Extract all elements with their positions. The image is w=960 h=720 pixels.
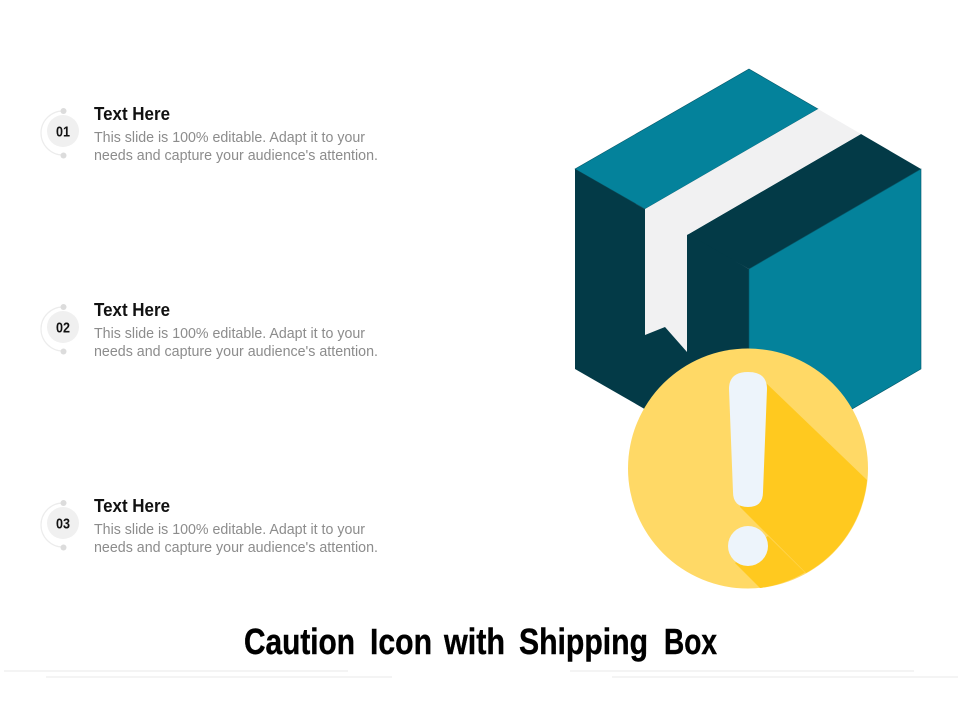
item 03 [41,495,378,556]
exclamation bar [729,372,767,507]
icon: shipping box [575,69,921,469]
item 02 body text: This slide is 100% editable. Adapt it to your [94,326,365,342]
step badge 02 [41,304,79,354]
title: Shipping [519,621,648,662]
caution circle [628,348,868,588]
item 03 body text: needs and capture your audience's attention. [94,540,378,556]
item 02 body text: needs and capture your audience's attention. [94,344,378,360]
title: Icon [370,621,432,662]
item 03 heading: Text Here [94,495,170,516]
step badge 03 [41,500,79,550]
item 03 body text: This slide is 100% editable. Adapt it to your [94,522,365,538]
step badge 02: 02 [56,320,70,336]
icon: caution sign [628,348,868,588]
box right side [749,169,921,469]
long shadow of exclamation dot [735,536,805,588]
title: Box [664,621,717,662]
title: Caution [244,621,355,662]
item 01 body text: This slide is 100% editable. Adapt it to your [94,130,365,146]
exclamation dot [728,526,768,566]
packing tape [645,109,861,352]
item 01 body text: needs and capture your audience's attention. [94,148,378,164]
box right flap [687,134,921,269]
box top flap [575,69,818,209]
step badge 03: 03 [56,516,70,532]
step badge 01: 01 [56,124,70,140]
title: with [443,621,505,662]
item 01 heading: Text Here [94,103,170,124]
item 01 [41,103,378,164]
box left side [575,169,749,469]
item 02 heading: Text Here [94,299,170,320]
long shadow of exclamation bar [740,382,867,573]
step badge 01 [41,108,79,158]
item 02 [41,299,378,360]
